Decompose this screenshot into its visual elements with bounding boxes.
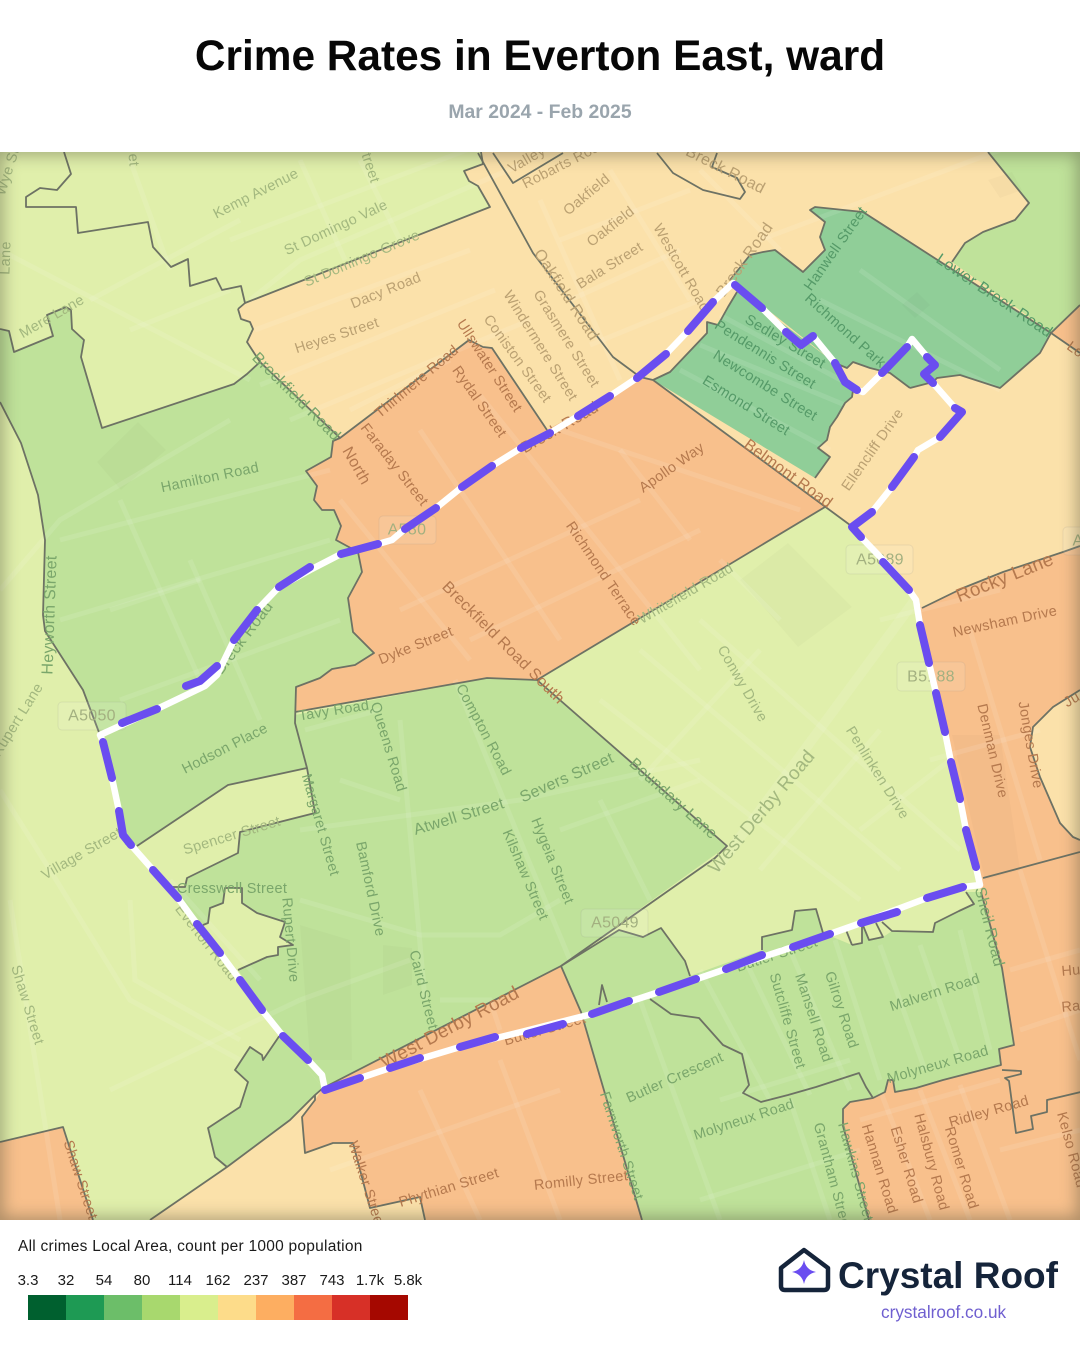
legend scale values: 237	[243, 1272, 269, 1289]
street labels on mid green areas	[39, 349, 1007, 1233]
street labels on light green areas: Spencer Street	[181, 814, 283, 858]
region: mid green Malvern Road and Butler Crescent	[561, 892, 1014, 1220]
street labels on orange areas: Breck Road	[518, 399, 602, 457]
street labels on orange areas: Halsbury Road	[910, 1112, 952, 1212]
area boundaries	[0, 152, 1080, 1220]
street labels on darker green areas: Pendennis Street	[712, 317, 818, 393]
street labels on light green areas: treet	[358, 152, 382, 185]
legend scale values: 5.8k	[394, 1272, 422, 1289]
legend scale values: 80	[134, 1272, 150, 1289]
street labels on mid green areas: Severs Street	[517, 750, 617, 806]
street labels on light green areas: St Domingo Vale	[282, 197, 390, 259]
choropleth map	[0, 152, 1080, 1220]
region: orange south-west corner	[0, 1127, 93, 1220]
street labels on orange areas	[60, 317, 1080, 1231]
street labels on orange areas: Richmond Terrace	[562, 519, 644, 629]
street labels on mid green areas: Kilshaw Street	[499, 827, 551, 923]
street labels on tan areas: Coniston Street	[480, 312, 554, 406]
region: darker green Sedley Street	[653, 292, 853, 478]
region: green patch at Everton Road	[208, 1035, 323, 1167]
street labels on light green areas: Everton Road	[171, 902, 241, 984]
parks and sports grounds	[97, 172, 1022, 1060]
region: tan north and east areas	[238, 152, 1080, 608]
street labels on mid green areas: Gilroy Road	[821, 970, 861, 1050]
street labels on orange areas: Breckfield Road South	[438, 578, 568, 708]
street labels on orange areas: Phythian Street	[397, 1165, 501, 1211]
street labels on mid green areas: Butler Crescent	[624, 1049, 726, 1107]
street labels on orange areas: Rocky Lane	[953, 549, 1057, 607]
street labels on orange areas: Denman Drive	[973, 702, 1011, 800]
road shields: A5049	[591, 914, 639, 932]
ward boundary: white line with purple dashes	[100, 283, 980, 1090]
street labels on mid green areas: Hygeia Street	[527, 815, 577, 907]
road shields	[58, 516, 1080, 937]
region: mid green Queens Road, Atwell Street	[170, 678, 727, 1088]
street labels on tan areas	[293, 133, 907, 494]
street labels on light green areas: Conwy Drive	[714, 643, 770, 725]
street labels on darker green areas: Hanwell Street	[801, 204, 871, 294]
street labels on mid green areas: Cresswell Street	[177, 881, 287, 897]
region: orange east	[843, 546, 1080, 1220]
street labels on mid green areas: Bamford Drive	[352, 840, 388, 938]
region: darker green Richmond Park	[730, 207, 1051, 388]
street labels on light green areas: St Domingo Grove	[302, 227, 422, 291]
street labels on mid green areas: Mansell Road	[791, 972, 835, 1064]
street labels on darker green areas: Esmond Street	[699, 373, 793, 439]
street labels on mid green areas: Hamilton Road	[160, 460, 260, 496]
street labels on mid green areas: Rupert Drive	[278, 897, 302, 983]
street labels on tan areas: Oakfield	[584, 204, 638, 250]
street labels on orange areas: Shaw Street	[60, 1138, 100, 1220]
brand name: Crystal Roof	[838, 1255, 1058, 1296]
street labels on darker green areas: Lower Breck Road	[933, 251, 1055, 341]
road network	[0, 145, 1080, 1220]
subtitle: date range: Mar 2024 - Feb 2025	[448, 101, 632, 123]
street labels on tan areas: Grasmere Street	[530, 287, 602, 391]
street labels on orange areas: Butler Street	[502, 1011, 588, 1049]
street labels on orange areas: Ullswater Street	[453, 317, 525, 415]
road shields: B5188	[907, 668, 955, 686]
street labels on light green areas: Whitefield Road	[636, 560, 736, 628]
street labels on orange areas: Thirlmere Road	[372, 342, 462, 422]
legend scale values: 162	[205, 1272, 231, 1289]
street labels on darker green areas: Sedley Street	[742, 312, 828, 372]
street labels on mid green areas: Breckfield Road	[248, 349, 344, 445]
street labels on orange areas: Romilly Street	[533, 1168, 629, 1194]
street labels on tan areas: Windermere Street	[500, 288, 580, 404]
street labels on orange areas: Jonges Drive	[1014, 700, 1046, 790]
street labels on mid green areas: Molyneux Road	[885, 1043, 991, 1087]
street labels on mid green areas: Malvern Road	[888, 971, 982, 1015]
road shields: A580	[388, 522, 426, 538]
street labels on mid green areas: Caird Street	[405, 949, 441, 1031]
icon: Crystal Roof house logo	[778, 1248, 830, 1292]
street labels on mid green areas: Queens Road	[367, 700, 409, 794]
street labels on tan areas: Breck Road	[713, 220, 777, 300]
street labels on mid green areas: Hodson Place	[180, 721, 270, 777]
street labels on tan areas: Ellencliff Drive	[839, 406, 907, 494]
street labels on tan areas: Bala Street	[574, 239, 646, 293]
road shields: A5050	[68, 708, 116, 724]
region: mid green Hamilton Road and Hodson Place	[0, 307, 374, 846]
street labels on mid green areas: Butler Street	[734, 934, 820, 976]
street labels on mid green areas: Molyneux Road	[692, 1096, 796, 1144]
street labels on mid green areas: Breck Road	[211, 598, 277, 678]
street labels on light green areas: Shaw Street	[7, 963, 47, 1047]
region: orange sliver north-east	[1052, 305, 1080, 353]
region: orange central Breck Road area	[295, 340, 825, 712]
legend scale values: 1.7k	[356, 1272, 384, 1289]
legend scale values: 54	[96, 1272, 112, 1289]
legend scale values: 743	[319, 1272, 345, 1289]
street labels on light green areas: Village Street	[39, 825, 125, 883]
road shields: A5089	[856, 552, 904, 568]
street labels on mid green areas: Sutcliffe Street	[766, 971, 808, 1071]
street labels on tan areas: Heyes Street	[293, 315, 381, 357]
region: tan south-west	[150, 1088, 425, 1220]
street labels on orange areas: Romer Road	[941, 1125, 981, 1211]
street labels on orange areas: Ridley Road	[947, 1093, 1031, 1131]
brand url: crystalroof.co.uk	[881, 1302, 1006, 1322]
legend colour ramp	[28, 1295, 408, 1320]
street labels on orange areas: Rydal Street	[449, 363, 509, 441]
street labels on orange areas: Belmont Road	[741, 436, 835, 512]
map edge vignette	[0, 152, 1080, 1220]
street labels on mid green areas: Atwell Street	[412, 795, 507, 839]
street labels on orange areas: Newsham Drive	[951, 603, 1059, 641]
legend scale values: 387	[281, 1272, 307, 1289]
region: orange south Butler Street	[302, 966, 642, 1220]
street labels on orange areas: Apollo Way	[636, 439, 708, 496]
street labels on tan areas: Westcott Road	[649, 221, 713, 315]
legend scale values: 32	[58, 1272, 74, 1289]
street labels on mid green areas: Boundary Lane	[626, 755, 720, 843]
street labels on light green areas: Kemp Avenue	[211, 166, 301, 222]
street labels on tan areas: Dacy Road	[348, 270, 424, 312]
street labels on orange areas: Dyke Street	[376, 624, 456, 668]
region: mid green far north-east	[952, 152, 1080, 333]
street labels on mid green areas: Farnworth Street	[596, 1090, 646, 1202]
street labels on orange areas: Hannan Road	[858, 1122, 900, 1216]
street labels on mid green areas: Tavy Road	[298, 698, 370, 724]
street labels on mid green areas: Sheil Road	[971, 886, 1007, 968]
street labels on orange areas: West Derby Road	[377, 983, 523, 1073]
street labels on darker green areas: Newcombe Street	[710, 347, 820, 425]
legend scale values	[18, 1272, 422, 1289]
street labels on tan areas: Oakfield Road	[530, 246, 602, 344]
street labels on mid green areas: Compton Road	[452, 682, 514, 778]
street labels on darker green areas: Richmond Park	[801, 291, 889, 372]
street labels on light green areas	[0, 147, 912, 1047]
street labels on light green areas: et	[124, 153, 142, 167]
legend title: All crimes Local Area, count per 1000 population	[18, 1238, 363, 1255]
legend scale values: 114	[168, 1272, 192, 1289]
region: tan pocket at Jonges Drive	[1030, 690, 1080, 840]
street labels on orange areas: North	[338, 444, 374, 488]
title: Crime Rates in Everton East, ward	[195, 32, 885, 79]
street labels on light green areas: Penlinken Drive	[842, 724, 912, 822]
street labels on light green areas: West Derby Road	[704, 746, 820, 878]
street labels on light green areas: Mere Lane	[17, 292, 87, 342]
street labels on mid green areas: Margaret Street	[298, 772, 342, 878]
street labels on orange areas: Faraday Street	[357, 421, 431, 509]
legend scale values: 3.3	[18, 1272, 38, 1289]
street labels on orange areas: Esher Road	[887, 1125, 925, 1205]
street labels on darker green areas	[699, 204, 1055, 439]
street labels on tan areas: Oakfield	[561, 171, 613, 219]
street labels on mid green areas: Heyworth Street	[39, 555, 61, 675]
